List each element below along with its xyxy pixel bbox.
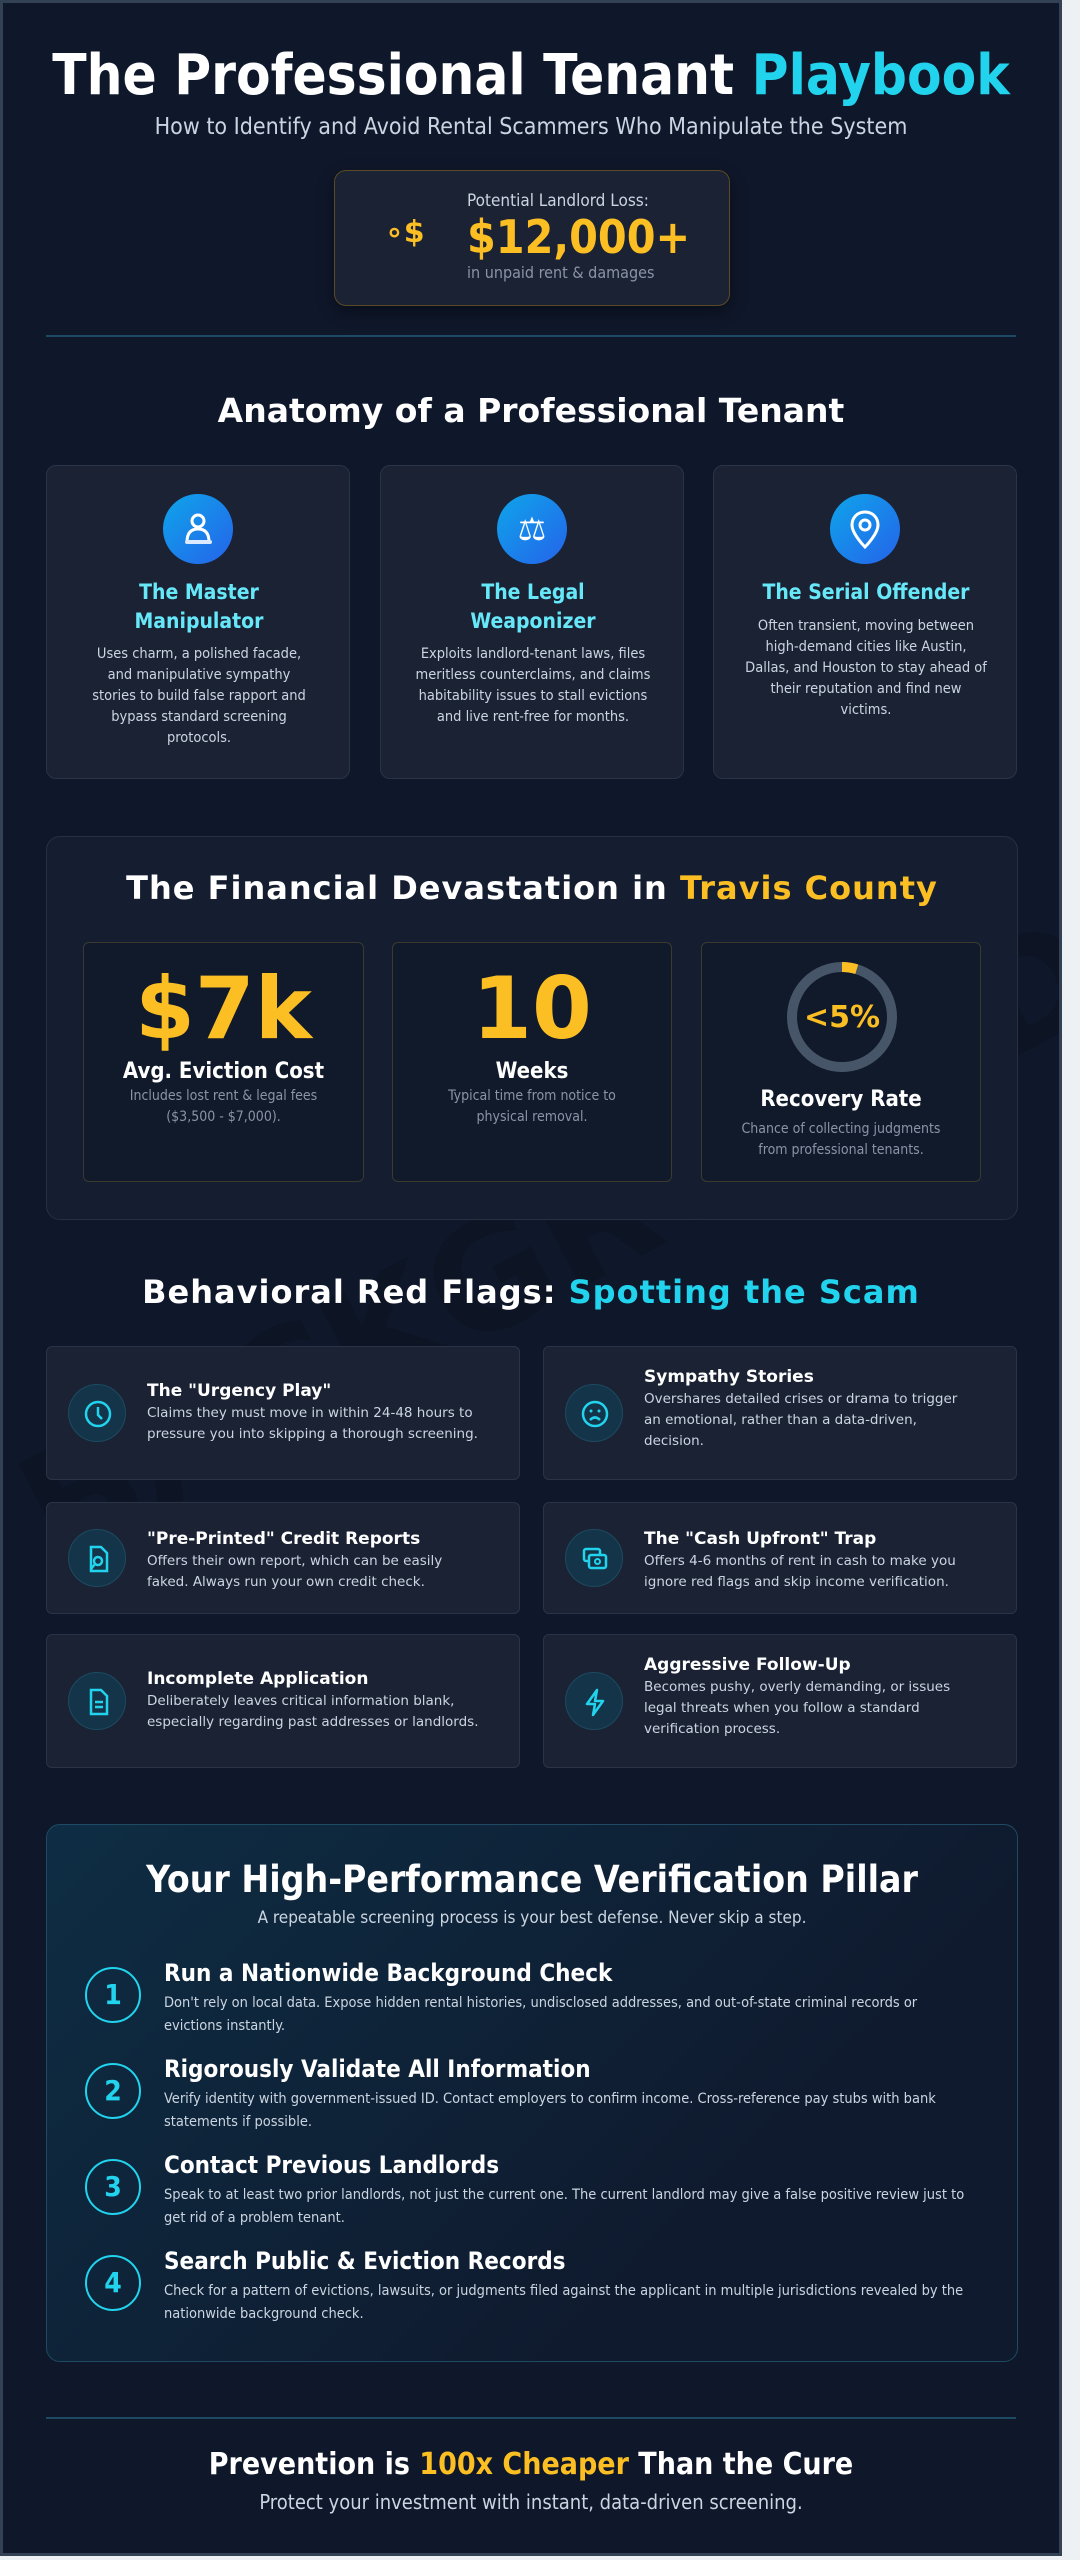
heading: red flags: Behavioral Red Flags: Spotting the Scam [142, 1273, 920, 1311]
step 4: Search Public & Eviction Records [164, 2247, 566, 2275]
flag: sympathy: Sympathy Stories [644, 1367, 814, 1387]
flag: incomplete application: Incomplete Application [147, 1669, 368, 1689]
stat: weeks: Weeks [496, 1059, 568, 1084]
step 2 [85, 2055, 936, 2130]
step 3: Speak to at least two prior landlords, not just the current one. The current landlord may give a false positive review just to get rid of a problem tenant. [164, 2187, 964, 2226]
step 2: 2 [104, 2074, 122, 2107]
step 1: Don't rely on local data. Expose hidden rental histories, undisclosed addresses, and out-of-state criminal records or evictions instantly. [164, 1995, 917, 2034]
flag: urgency: Claims they must move in within 24-48 hours to pressure you into skipping a thorough screening. [147, 1405, 478, 1442]
panel: financial devastation [46, 836, 1018, 1220]
heading: The Financial Devastation in Travis County [126, 869, 938, 907]
flag: aggressive follow-up: Becomes pushy, overly demanding, or issues legal threats when you follow a standard verification process. [644, 1679, 950, 1737]
flag: sympathy: Overshares detailed crises or drama to trigger an emotional, rather than a data-driven, decision. [644, 1391, 957, 1449]
panel: master manipulator: Uses charm, a polished facade, and manipulative sympathy stories to build false rapport and bypass standard screening protocols. [92, 646, 306, 746]
stat: recovery rate: Recovery Rate [760, 1087, 922, 1112]
flag: incomplete application: Deliberately leaves critical information blank, especially regarding past addresses or landlords. [147, 1693, 478, 1730]
stat: weeks: 10 [472, 959, 592, 1059]
step 3: Contact Previous Landlords [164, 2151, 499, 2179]
loss text: in unpaid rent & damages [467, 263, 654, 282]
flag: cash upfront: Offers 4-6 months of rent in cash to make you ignore red flags and skip income verification. [644, 1553, 956, 1590]
flag: aggressive follow-up: Aggressive Follow-Up [644, 1655, 851, 1675]
step 3: 3 [104, 2170, 122, 2203]
stat: eviction cost: $7k [135, 959, 312, 1059]
icon: person [163, 494, 233, 564]
panel: master manipulator: The Master [139, 580, 259, 604]
stat: recovery rate: Chance of collecting judgments [741, 1121, 940, 1137]
stat: recovery rate: from professional tenants. [758, 1142, 924, 1158]
step 1: 1 [104, 1978, 122, 2011]
stat: eviction cost [83, 942, 364, 1182]
chart: ring: <5% [804, 1000, 880, 1035]
panel: legal weaponizer: The Legal [481, 580, 585, 604]
footer heading: Prevention is 100x Cheaper Than the Cure [209, 2447, 853, 2482]
chart: ring [787, 962, 897, 1072]
panel: verification pillar [46, 1824, 1018, 2362]
step 4 [85, 2247, 963, 2322]
icon: location pin [830, 494, 900, 564]
panel: legal weaponizer [380, 465, 684, 779]
step 4: Check for a pattern of evictions, lawsuits, or judgments filed against the applicant in multiple jurisdictions revealed by the nationwide background check. [164, 2283, 963, 2322]
icon: gavel [497, 494, 567, 564]
panel: serial offender: The Serial Offender [762, 580, 970, 604]
stat: eviction cost: ($3,500 - $7,000). [166, 1109, 281, 1125]
panel: legal weaponizer: Weaponizer [470, 609, 596, 633]
icon: document search [68, 1529, 126, 1587]
icon: gavel: ⚖ [518, 510, 546, 548]
flag: credit reports: "Pre-Printed" Credit Reports [147, 1529, 420, 1549]
flag: sympathy [543, 1346, 1017, 1480]
heading: Your High-Performance Verification Pillar [146, 1858, 918, 1901]
icon: money: ∘$ [385, 215, 425, 250]
panel: master manipulator [46, 465, 350, 779]
callout: landlord loss [334, 170, 730, 306]
icon: cash [565, 1529, 623, 1587]
panel: master manipulator: Manipulator [134, 609, 264, 633]
stat: weeks: Typical time from notice to [448, 1088, 616, 1104]
flag: cash upfront [543, 1502, 1017, 1614]
flag: aggressive follow-up [543, 1634, 1017, 1768]
step 4: 4 [104, 2266, 122, 2299]
panel: serial offender [713, 465, 1017, 779]
footer text: Protect your investment with instant, data-driven screening. [259, 2490, 803, 2514]
flag: credit reports [46, 1502, 520, 1614]
flag: cash upfront: The "Cash Upfront" Trap [644, 1529, 876, 1549]
step 3 [85, 2151, 964, 2226]
flag: urgency: The "Urgency Play" [147, 1381, 331, 1401]
stat: weeks [392, 942, 672, 1182]
stat: weeks: physical removal. [477, 1109, 587, 1125]
loss text: $12,000+ [467, 210, 690, 264]
loss text: Potential Landlord Loss: [467, 191, 649, 211]
icon: clock [68, 1384, 126, 1442]
flag: credit reports: Offers their own report, which can be easily faked. Always run your own credit check. [147, 1553, 442, 1590]
icon: document [68, 1672, 126, 1730]
flag: incomplete application [46, 1634, 520, 1768]
flag: urgency [46, 1346, 520, 1480]
subheading: A repeatable screening process is your best defense. Never skip a step. [258, 1908, 806, 1928]
step 1: Run a Nationwide Background Check [164, 1959, 612, 1987]
step 2: Verify identity with government-issued ID. Contact employers to confirm income. Cross-reference pay stubs with bank statements if possible. [164, 2091, 936, 2130]
panel: legal weaponizer: Exploits landlord-tenant laws, files meritless counterclaims, and claims habitability issues to stall evictions and live rent-free for months. [416, 646, 650, 725]
icon: sad face [565, 1384, 623, 1442]
heading: anatomy: Anatomy of a Professional Tenant [218, 391, 844, 430]
stat: recovery rate [701, 942, 981, 1182]
subtitle: How to Identify and Avoid Rental Scammers Who Manipulate the System [155, 114, 907, 140]
loss text [467, 191, 690, 282]
panel: serial offender: Often transient, moving between high-demand cities like Austin, Dallas, and Houston to stay ahead of their reputation and find new victims. [745, 618, 987, 718]
title: The Professional Tenant Playbook [52, 43, 1010, 108]
step 2: Rigorously Validate All Information [164, 2055, 591, 2083]
stat: eviction cost: Avg. Eviction Cost [123, 1059, 324, 1084]
icon: lightning [565, 1672, 623, 1730]
stat: eviction cost: Includes lost rent & legal fees [130, 1088, 317, 1104]
step 1 [85, 1959, 918, 2034]
